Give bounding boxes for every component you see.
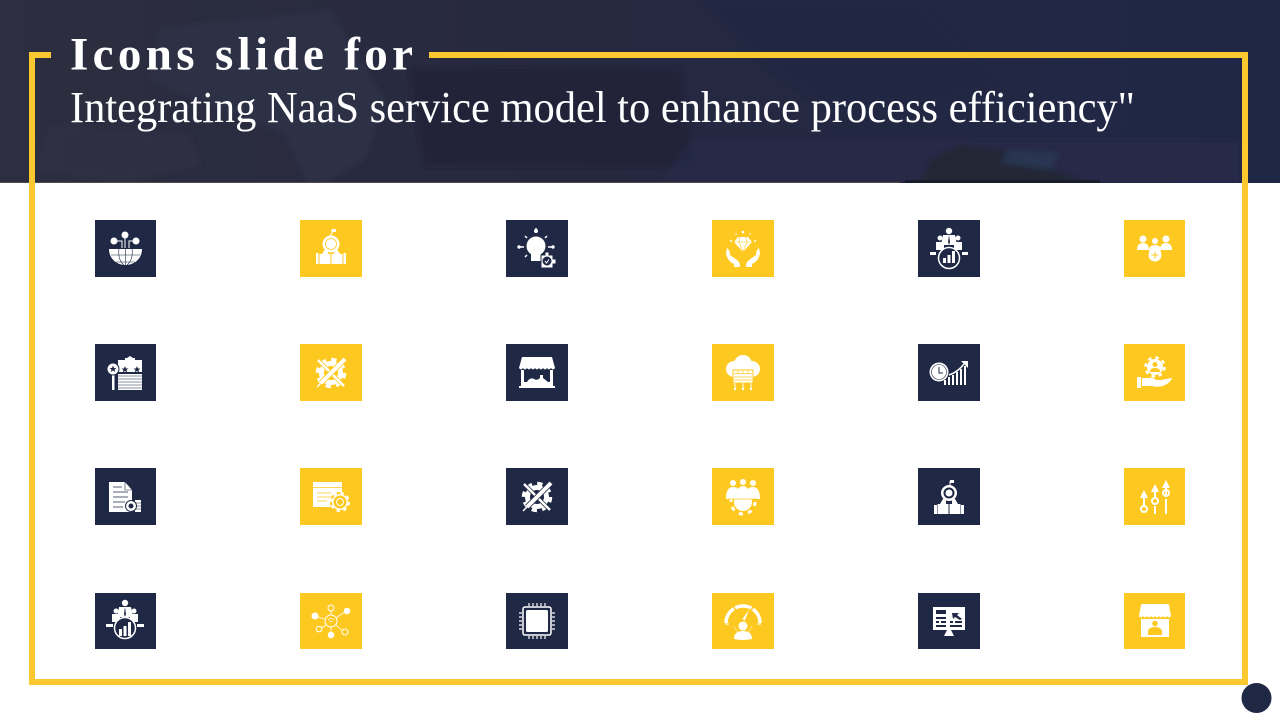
tile: network hub with wifi <box>300 593 362 649</box>
tile: shop front with awning <box>506 344 568 401</box>
tile: business team around bar chart <box>918 220 980 277</box>
tile: clock with rising graph <box>918 344 980 401</box>
tile: hand holding gear with person <box>1124 344 1185 401</box>
tile: clipboard with star rating <box>95 344 156 401</box>
tile: rising arrows with gears <box>1124 468 1185 525</box>
tile: cloud with server <box>712 344 774 401</box>
page number circle <box>1242 683 1272 713</box>
header photo banner <box>0 0 1280 190</box>
tile: hands holding gear and flag <box>300 220 362 277</box>
tile: speed gauge with person <box>712 593 774 649</box>
tile: team with plus sign <box>1124 220 1185 277</box>
tile: monitor with cursor and table <box>918 593 980 649</box>
tile: browser window with gear <box>300 468 362 525</box>
tile: team on gear <box>712 468 774 525</box>
tile: invoice document with coins <box>95 468 156 525</box>
tile: diamond in caring hands <box>712 220 774 277</box>
subtitle: Integrating NaaS service model: Integrating NaaS service model to enhance process efficiency" <box>70 83 1135 132</box>
tile: gear with crossed pencil and wrench, dark <box>506 468 568 525</box>
tile: team around bar chart <box>95 593 156 649</box>
tile: gear with crossed pencil and wrench <box>300 344 362 401</box>
title: Icons slide for: Icons slide for <box>70 28 413 80</box>
tile: kiosk store with person <box>1124 593 1185 649</box>
tile: light bulb with puzzle piece <box>506 220 568 277</box>
tile: microchip <box>506 593 568 649</box>
tile: globe with network nodes <box>95 220 156 277</box>
tile: hands holding gear and flag, dark <box>918 468 980 525</box>
